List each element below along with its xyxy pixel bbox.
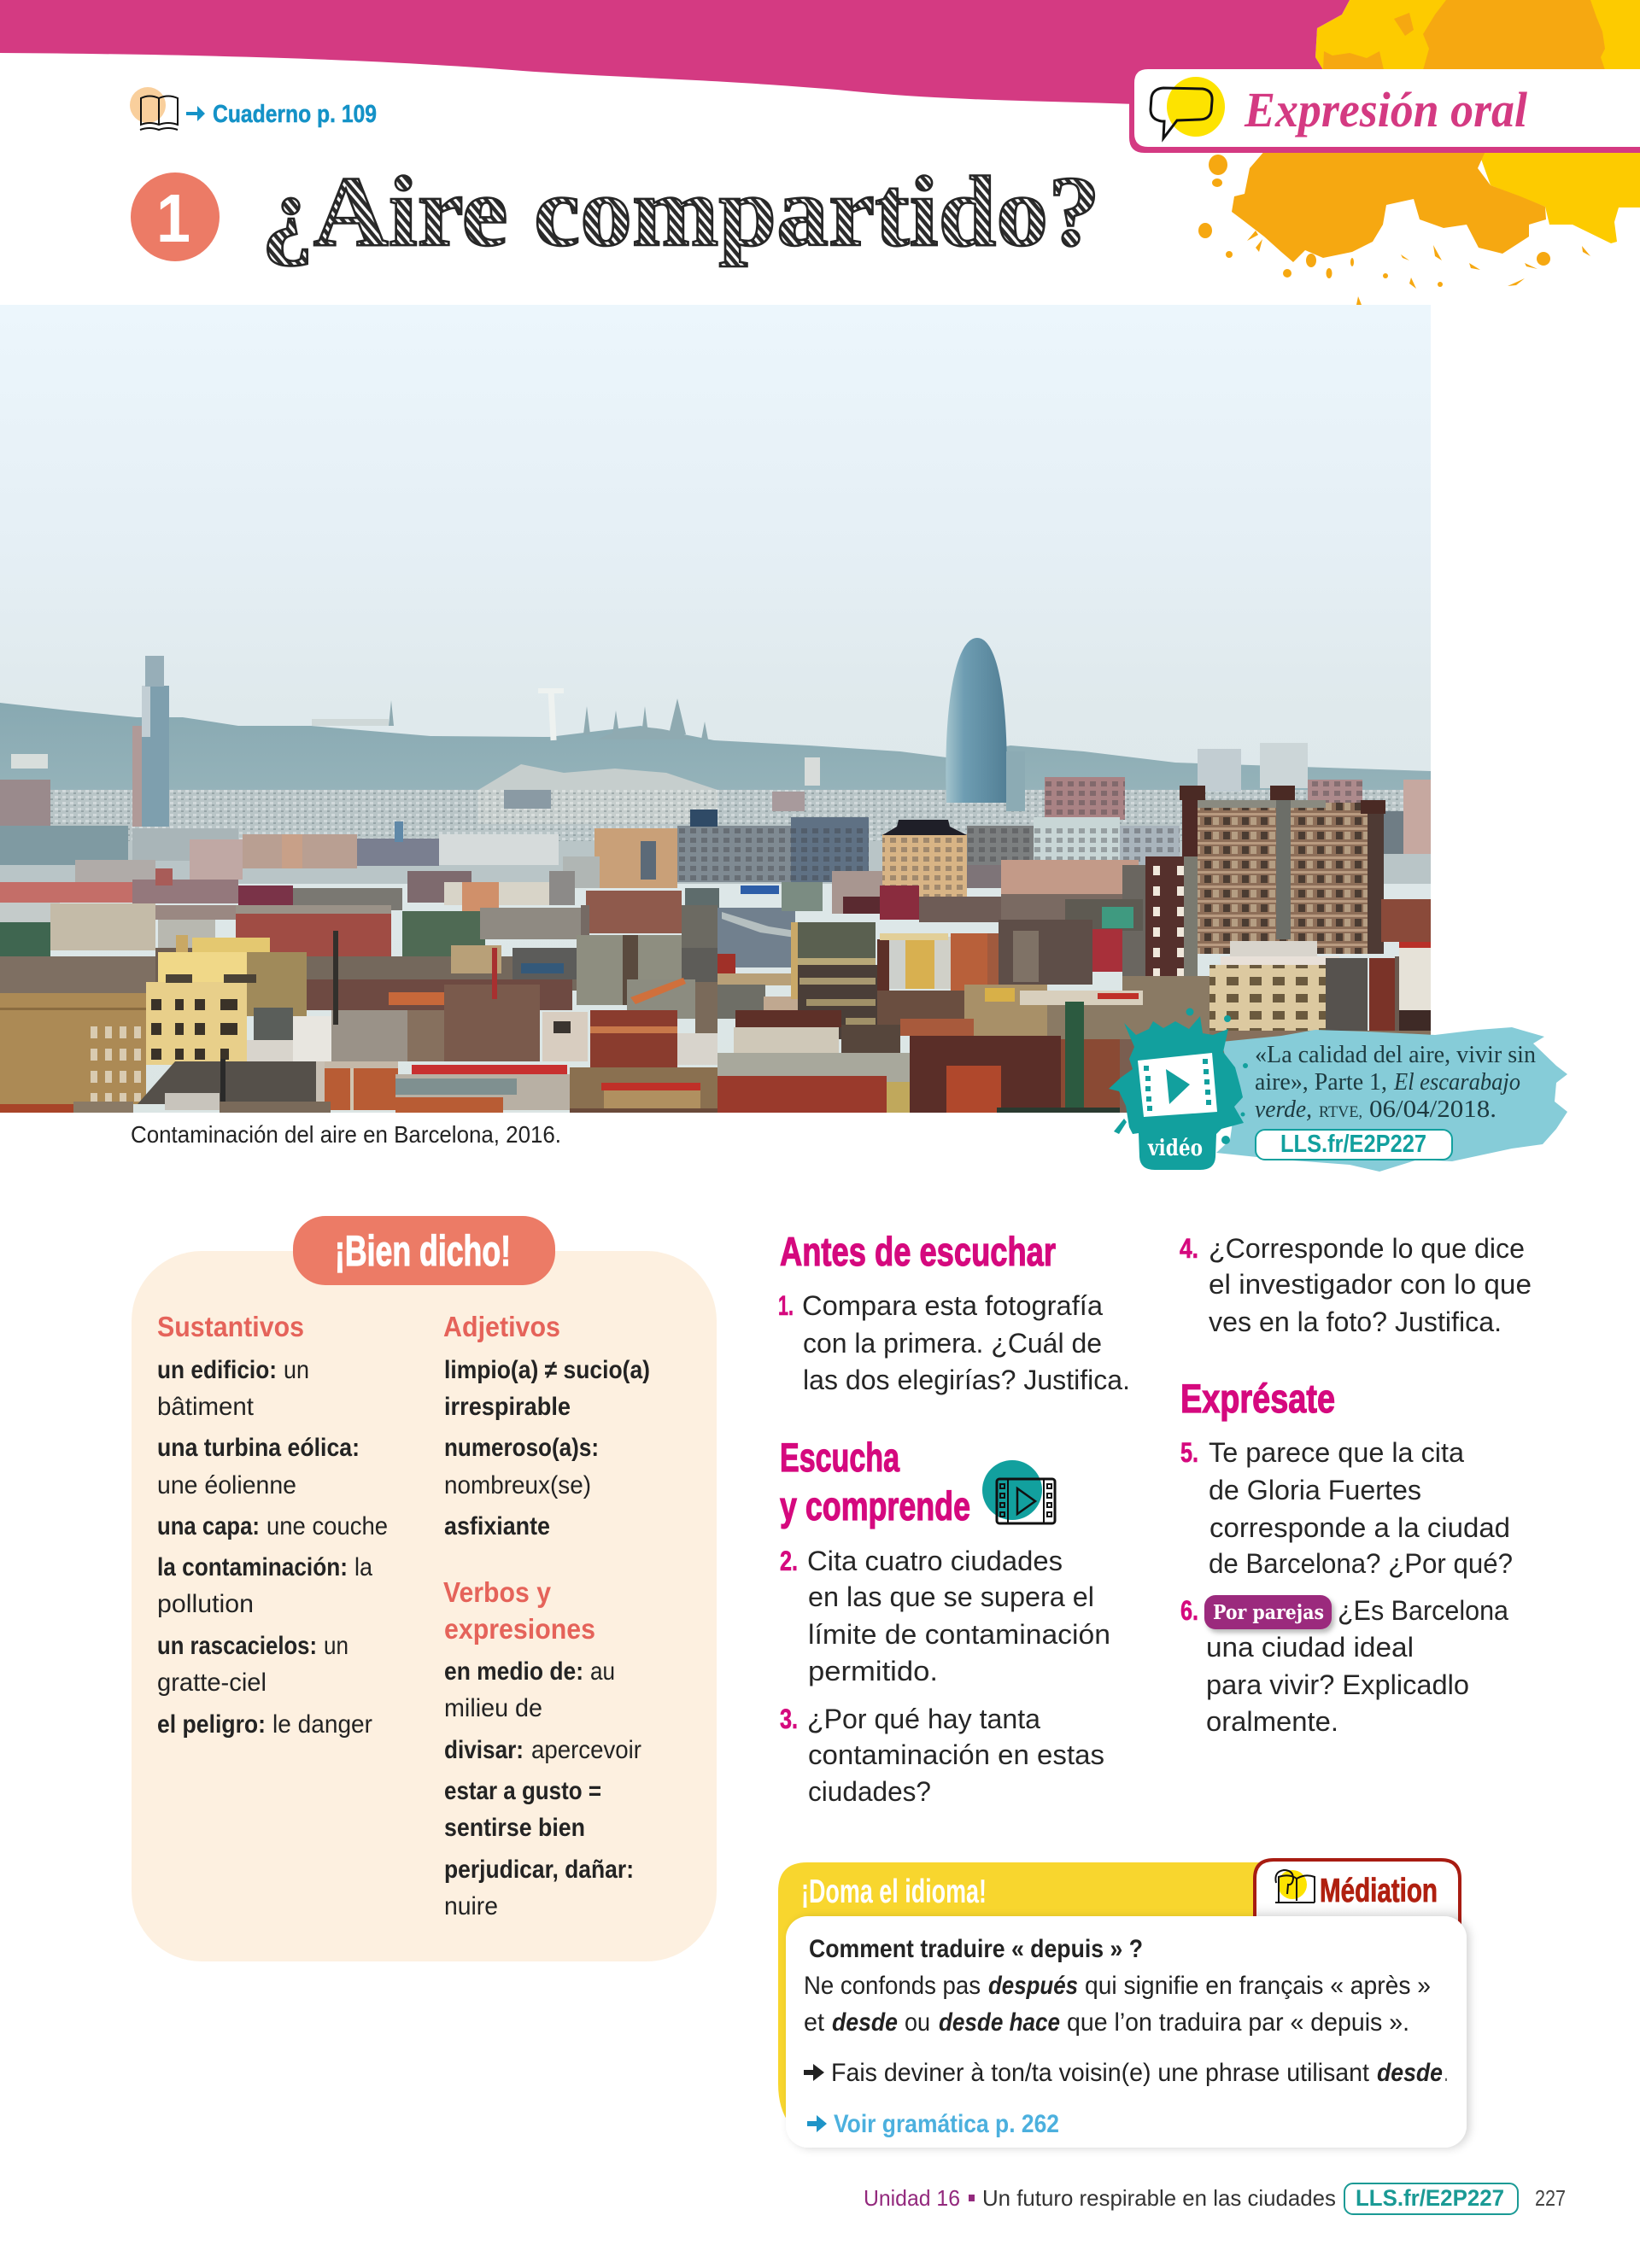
column: Adjetivos: numeroso(a)s: — [444, 1434, 599, 1462]
tab white face — [1134, 69, 1640, 147]
column: Sustantivos: la — [354, 1553, 372, 1581]
column: Sustantivos: el peligro: — [157, 1710, 266, 1739]
yellow header card — [778, 1862, 1264, 2125]
question 5: de Barcelona? ¿Por qué? — [1209, 1548, 1513, 1579]
video label: vidéo — [1147, 1136, 1203, 1161]
number badge: 1 — [156, 180, 190, 256]
question 3: ¿Por qué hay tanta — [807, 1704, 1040, 1734]
question 2: 2. — [780, 1546, 798, 1576]
card explanation: et — [804, 2008, 825, 2037]
card explanation: Ne confonds pas — [804, 1972, 981, 2000]
panel: Doma el idioma — [778, 1860, 1467, 2148]
panel: Doma el idioma: . — [1444, 2059, 1448, 2087]
column: Verbos y expresiones: nuire — [444, 1892, 498, 1920]
heading — [780, 1435, 970, 1529]
link text: Cuaderno p. 109 — [213, 101, 377, 128]
question 6 — [1180, 1595, 1508, 1737]
column: Verbos y expresiones: au — [590, 1657, 615, 1686]
card explanation: ou — [905, 2008, 930, 2037]
column: Verbos y expresiones: apercevoir — [531, 1736, 641, 1764]
brush stroke background — [1216, 1027, 1567, 1172]
photo caption: Contaminación del aire en Barcelona, 2016. — [131, 1121, 561, 1148]
column: Verbos y expresiones: divisar: — [444, 1736, 524, 1764]
citation text: verde, — [1255, 1096, 1312, 1123]
column: Verbos y expresiones — [443, 1576, 641, 1920]
question 6: para vivir? Explicadlo — [1206, 1669, 1469, 1700]
section: Antes de escuchar — [778, 1229, 1130, 1395]
arrow — [186, 106, 205, 121]
card explanation: qui signifie en français « après » — [1085, 1972, 1431, 2000]
video icon — [1109, 1008, 1248, 1170]
question 2: permitido. — [808, 1656, 938, 1686]
citation text: aire», Parte 1, — [1255, 1069, 1387, 1096]
film frame — [1138, 1053, 1217, 1117]
question 5: Te parece que la cita — [1209, 1437, 1464, 1468]
question 4: el investigador con lo que — [1209, 1269, 1532, 1300]
white content card — [786, 1916, 1467, 2148]
citation text: «La calidad del aire, vivir sin — [1255, 1042, 1536, 1068]
column: Sustantivos — [157, 1311, 388, 1739]
tab: Médiation: Médiation — [1320, 1873, 1438, 1909]
card explanation: que l’on traduira par « depuis ». — [1067, 2008, 1409, 2037]
question 6: una ciudad ideal — [1206, 1632, 1414, 1663]
section: Escucha y comprende — [780, 1435, 1110, 1807]
top magenta band — [0, 0, 1350, 104]
video callout — [1109, 1008, 1567, 1172]
question 6: 6. — [1180, 1595, 1198, 1626]
column: Sustantivos: pollution — [157, 1590, 254, 1618]
icon: open book — [130, 87, 178, 130]
column: Verbos y expresiones: sentirse bien — [444, 1814, 585, 1842]
question 1: las dos elegirías? Justifica. — [803, 1365, 1130, 1395]
column: Verbos y expresiones: Verbos y — [443, 1576, 552, 1608]
question 6: oralmente. — [1206, 1706, 1338, 1737]
panel heading pill: ¡Bien dicho! — [335, 1227, 511, 1275]
question 1: con la primera. ¿Cuál de — [803, 1328, 1102, 1359]
question 4 — [1180, 1233, 1532, 1337]
column: Sustantivos: bâtiment — [157, 1393, 255, 1421]
column: Sustantivos: une couche — [266, 1512, 388, 1540]
panel heading: ¡Doma el idioma! — [801, 1873, 987, 1910]
question 5 — [1180, 1437, 1513, 1579]
paint splash: yellow and orange — [1196, 0, 1640, 305]
card explanation — [804, 1972, 1431, 2037]
title: ¿Aire compartido? — [261, 155, 1100, 267]
icon: film strip — [982, 1460, 1055, 1523]
column: Adjetivos: nombreux(se) — [444, 1471, 591, 1499]
column: Adjetivos: asfixiante — [444, 1512, 550, 1540]
question 3: 3. — [780, 1704, 798, 1734]
column: Adjetivos — [443, 1311, 650, 1540]
question 2: en las que se supera el — [808, 1581, 1094, 1612]
column: Adjetivos: limpio(a) ≠ sucio(a) — [444, 1356, 650, 1384]
card instruction: Fais deviner à ton/ta voisin(e) une phrase utilisant — [831, 2059, 1370, 2087]
question 5: de Gloria Fuertes — [1209, 1475, 1421, 1505]
column: Adjetivos: Adjetivos — [443, 1311, 560, 1342]
column: Sustantivos: gratte-ciel — [157, 1669, 266, 1697]
tab title: Expresión oral — [1244, 82, 1528, 137]
question 2: Cita cuatro ciudades — [807, 1546, 1063, 1576]
heading: y comprende — [780, 1483, 970, 1529]
column: Sustantivos: Sustantivos — [157, 1311, 304, 1342]
column: Verbos y expresiones: estar a gusto = — [444, 1777, 601, 1805]
column: Verbos y expresiones: expresiones — [444, 1613, 595, 1645]
question 5: corresponde a la ciudad — [1210, 1512, 1510, 1543]
question 4: ves en la foto? Justifica. — [1209, 1306, 1502, 1337]
card explanation: después — [988, 1972, 1078, 2000]
footer — [864, 2183, 1566, 2214]
play triangle — [1166, 1069, 1190, 1104]
question 1: Compara esta fotografía — [802, 1290, 1103, 1321]
citation text: 06/04/2018. — [1369, 1096, 1496, 1123]
photo: Barcelona skyline under smog — [0, 305, 1431, 1113]
question 2: límite de contaminación — [808, 1619, 1110, 1650]
question 3: ciudades? — [808, 1776, 931, 1807]
column: Sustantivos: una turbina eólica: — [157, 1434, 360, 1462]
heading: Antes de escuchar — [780, 1229, 1056, 1274]
column: Sustantivos: un rascacielos: — [157, 1632, 317, 1660]
column: Sustantivos: un — [284, 1356, 309, 1384]
citation text: RTVE, — [1319, 1103, 1362, 1121]
question 1 — [778, 1290, 1130, 1395]
section tab: Expresión oral — [1129, 69, 1640, 153]
panel background — [132, 1251, 717, 1961]
badge: Por parejas: Por parejas — [1213, 1601, 1324, 1624]
question 1: 1. — [778, 1290, 794, 1321]
column: Sustantivos: la contaminación: — [157, 1553, 348, 1581]
footer: Un futuro respirable en las ciudades — [982, 2185, 1336, 2211]
footer: Unidad 16 — [864, 2185, 960, 2211]
workbook reference — [130, 87, 377, 130]
panel heading pill — [293, 1216, 555, 1285]
column: Verbos y expresiones: milieu de — [444, 1694, 542, 1722]
card instruction: desde — [1377, 2059, 1443, 2087]
page number: 227 — [1535, 2185, 1566, 2211]
tab: Médiation — [1255, 1860, 1460, 1932]
film perforations — [1144, 1059, 1211, 1111]
section: Exprésate — [1180, 1376, 1513, 1737]
question 6: ¿Es Barcelona — [1338, 1595, 1508, 1626]
question 3: contaminación en estas — [808, 1739, 1104, 1770]
link pill: LLS.fr/E2P227 — [1280, 1131, 1426, 1158]
question 4: ¿Corresponde lo que dice — [1209, 1233, 1525, 1264]
column: Adjetivos: irrespirable — [444, 1393, 571, 1421]
question 5: 5. — [1180, 1437, 1198, 1468]
panel: Bien dicho vocabulary — [132, 1216, 717, 1961]
question 3 — [780, 1704, 1104, 1807]
tab frame — [1129, 69, 1640, 153]
card heading: Comment traduire « depuis » ? — [809, 1935, 1143, 1963]
heading: Exprésate — [1180, 1376, 1335, 1421]
question 4: 4. — [1180, 1233, 1198, 1264]
footer link pill: LLS.fr/E2P227 — [1356, 2185, 1504, 2211]
number badge — [131, 172, 220, 261]
badge: Por parejas — [1204, 1595, 1332, 1629]
column: Verbos y expresiones: en medio de: — [444, 1657, 583, 1686]
column: Verbos y expresiones: perjudicar, dañar: — [444, 1856, 634, 1884]
card explanation: desde hace — [939, 2008, 1060, 2037]
column: Sustantivos: un edificio: — [157, 1356, 277, 1384]
icon: speech bubble — [1151, 77, 1225, 138]
citation text — [1255, 1042, 1536, 1123]
heading: Escucha — [780, 1435, 900, 1480]
column: Sustantivos: un — [324, 1632, 348, 1660]
column: Sustantivos: le danger — [272, 1710, 372, 1739]
question 2 — [780, 1546, 1110, 1686]
grammar link: Voir gramática p. 262 — [834, 2110, 1059, 2138]
icon: book with speech bubble — [1275, 1870, 1315, 1903]
column: Sustantivos: une éolienne — [157, 1471, 296, 1499]
citation text: El escarabajo — [1393, 1069, 1520, 1096]
card explanation: desde — [832, 2008, 898, 2037]
column: Sustantivos: una capa: — [157, 1512, 260, 1540]
